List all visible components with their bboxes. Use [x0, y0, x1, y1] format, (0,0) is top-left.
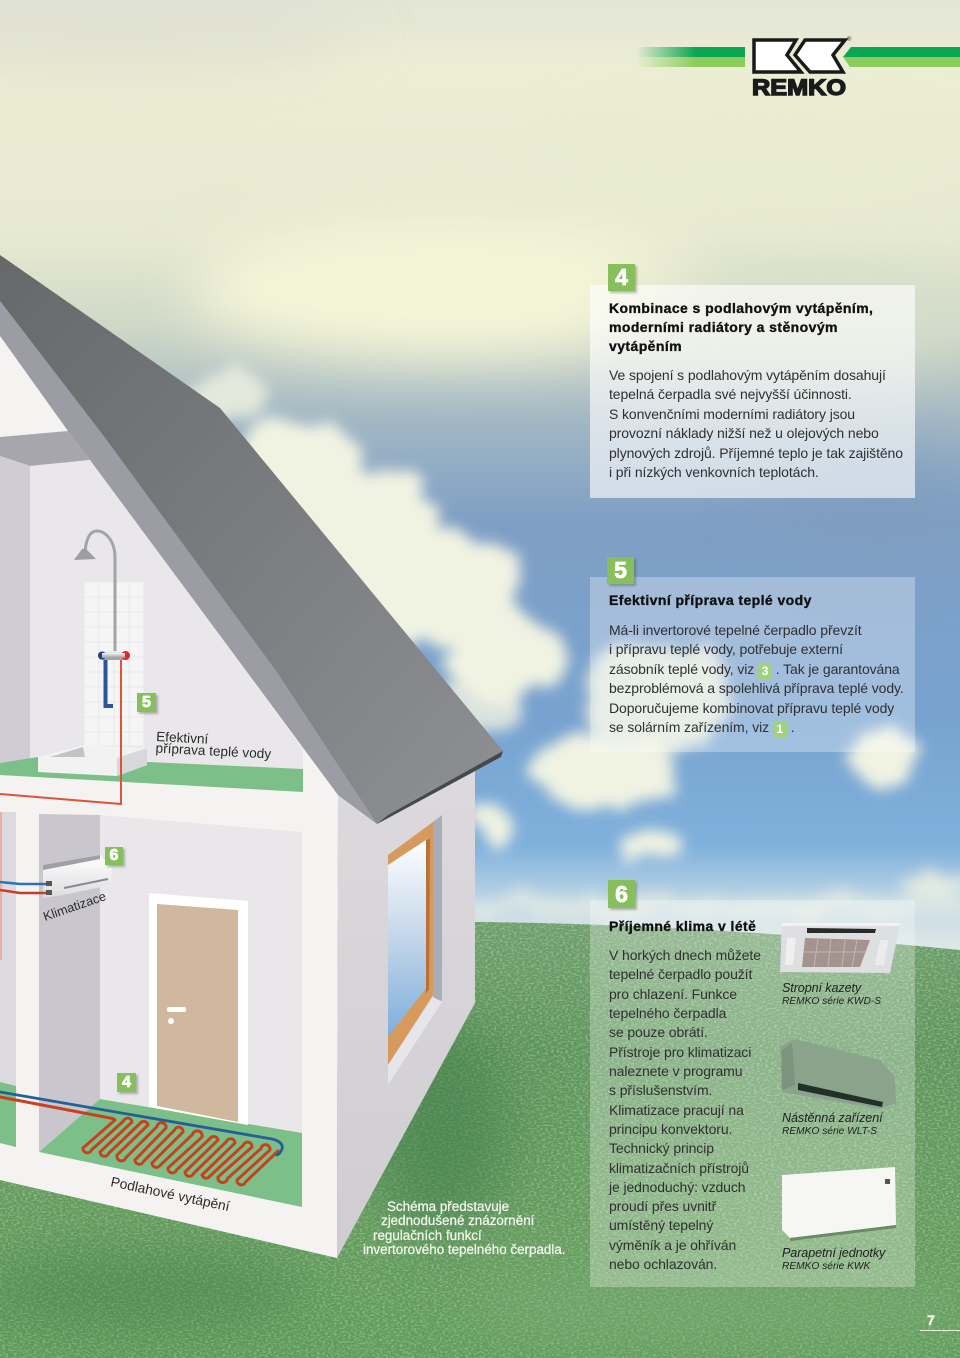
label: Podlahové vytápění: Podlahové vytápění — [109, 1174, 231, 1214]
panel 6 body text: pro chlazení. Funkce — [609, 986, 737, 1002]
schematic caption: zjednodušené znázornění — [381, 1213, 534, 1228]
RK emblem — [754, 40, 845, 72]
product series: WLT-S: REMKO série WLT-S — [782, 1126, 877, 1137]
label: Efektivní příprava teplé vody: příprava teplé vody — [155, 741, 272, 762]
schematic caption: Schéma představuje — [387, 1199, 509, 1214]
panel 6 body text: nebo ochlazován. — [609, 1256, 717, 1272]
schematic caption: regulačních funkcí — [373, 1228, 482, 1243]
panel 4 body text: provozní náklady nižší než u olejových nebo — [609, 425, 879, 441]
panel 4 body text: plynových zdrojů. Příjemné teplo je tak zajištěno — [609, 445, 903, 461]
product label: ceiling cassettes: Stropní kazety — [782, 981, 861, 995]
underfloor heating pipes — [0, 1092, 282, 1185]
panel 4 body text: tepelná čerpadla své nejvyšší účinnosti. — [609, 386, 852, 402]
panel 5 body text: Doporučujeme kombinovat přípravu teplé vody — [609, 700, 894, 716]
panel 6 background — [590, 900, 915, 1287]
panel 6 body text: výměník a je ohříván — [609, 1237, 736, 1253]
badge 4 — [608, 264, 635, 291]
panel 6 body text — [608, 947, 761, 1272]
panel 5 body text: bezproblémová a spolehlivá příprava teplé vody. — [609, 680, 904, 696]
REMKO logo with green bars — [638, 36, 960, 100]
panel 5: efficient hot water — [590, 557, 915, 752]
panel 6 body text: Klimatizace pracují na — [609, 1102, 744, 1118]
panel 4 heading — [608, 300, 873, 354]
badge 6: 6 — [615, 881, 628, 907]
panel 5 heading: Efektivní příprava teplé vody — [609, 592, 812, 608]
badge 6 — [608, 880, 635, 908]
panel 4 body text — [609, 367, 903, 480]
panel 5 body text: 3 — [762, 664, 768, 678]
panel 4 heading: moderními radiátory a stěnovým — [609, 319, 838, 335]
panel 6 body text: s příslušenstvím. — [609, 1082, 712, 1098]
small badge 6: 6 — [110, 847, 118, 864]
shower head and pipe — [74, 531, 115, 652]
panel 4 background — [590, 285, 915, 498]
side wall of house — [337, 757, 501, 1258]
panel 6 body text: principu konvektoru. — [609, 1121, 732, 1137]
panel 6 body text: umístěný tepelný — [609, 1217, 713, 1233]
product series: KWK: REMKO série KWK — [782, 1261, 870, 1272]
panel 5 body text: i přípravu teplé vody, potřebuje externí — [609, 641, 843, 657]
panel 6 body text: je jednoduchý: vzduch — [609, 1179, 745, 1195]
panel 6 body text: tepelné čerpadlo použít — [609, 966, 752, 982]
panel 6 heading: Příjemné klima v létě — [609, 918, 756, 934]
REMKO wordmark: REMKO — [752, 75, 846, 100]
house front cut face — [0, 300, 338, 1258]
panel 6 body text: V horkých dnech můžete — [609, 947, 761, 963]
tiles — [84, 582, 144, 746]
panel 4 body text: S konvenčními moderními radiátory jsou — [609, 406, 855, 422]
attic room — [0, 431, 303, 792]
badge 4: 4 — [615, 264, 628, 290]
panel 6 body text: Technický princip — [609, 1140, 714, 1156]
product series: KWD-S: REMKO série KWD-S — [782, 996, 881, 1007]
ceiling cassette — [780, 923, 900, 973]
panel 6: pleasant climate in summer — [590, 880, 915, 1287]
page number: 7 — [927, 1312, 935, 1328]
label: Efektivní příprava teplé vody: Efektivní — [156, 729, 209, 747]
page number — [920, 1312, 960, 1331]
small badge 5 — [137, 693, 156, 712]
floor console unit — [782, 1167, 896, 1241]
small badge 4 — [117, 1073, 136, 1092]
panel 5 background — [590, 577, 915, 752]
label: Klimatizace: Klimatizace — [41, 888, 108, 924]
small badge 4: 4 — [122, 1074, 131, 1091]
panel 6 body text: Přístroje pro klimatizaci — [609, 1044, 751, 1060]
badge 5: 5 — [614, 557, 627, 583]
panel 5 body text: zásobník teplé vody, viz . Tak je garantována — [609, 661, 900, 677]
panel 4 heading: Kombinace s podlahovým vytápěním, — [609, 300, 873, 316]
schematic caption: invertorového tepelného čerpadla. — [363, 1242, 566, 1257]
small badge 5: 5 — [142, 694, 151, 711]
shower tray — [38, 745, 147, 776]
panel 5 body text: se solárním zařízením, viz . — [609, 719, 794, 735]
panel 5 body text — [609, 622, 904, 737]
panel 4 heading: vytápěním — [609, 338, 682, 354]
product label: wall units: Nástěnná zařízení — [782, 1111, 883, 1125]
hot and cold pipes — [0, 651, 130, 804]
roof — [0, 255, 503, 824]
badge 5 — [607, 557, 634, 584]
door — [149, 893, 248, 1125]
schematic caption — [363, 1199, 566, 1258]
ground floor room — [0, 812, 302, 1207]
registered mark: ® — [847, 36, 852, 43]
wall-mounted unit — [780, 1039, 896, 1109]
panel 4 body text: Ve spojení s podlahovým vytápěním dosahují — [609, 367, 886, 383]
panel 4 body text: i při nízkých venkovních teplotách. — [609, 464, 819, 480]
product label: console units: Parapetní jednotky — [782, 1246, 885, 1260]
panel 4: combination with floor heating — [590, 264, 915, 498]
air conditioner — [0, 855, 112, 898]
panel 6 body text: klimatizačních přístrojů — [609, 1160, 749, 1176]
panel 5 body text: Má-li invertorové tepelné čerpadlo převzít — [609, 622, 862, 638]
green stripes — [636, 47, 960, 67]
panel 6 body text: tepelného čerpadla — [609, 1005, 726, 1021]
small badge 6 — [105, 847, 123, 865]
panel 6 body text: proudí přes uvnitř — [609, 1198, 716, 1214]
panel 5 body text: 1 — [776, 722, 783, 736]
panel 6 body text: naleznete v programu — [609, 1063, 742, 1079]
panel 6 body text: se pouze obrátí. — [609, 1024, 708, 1040]
shower — [0, 531, 147, 804]
window — [388, 815, 442, 1085]
